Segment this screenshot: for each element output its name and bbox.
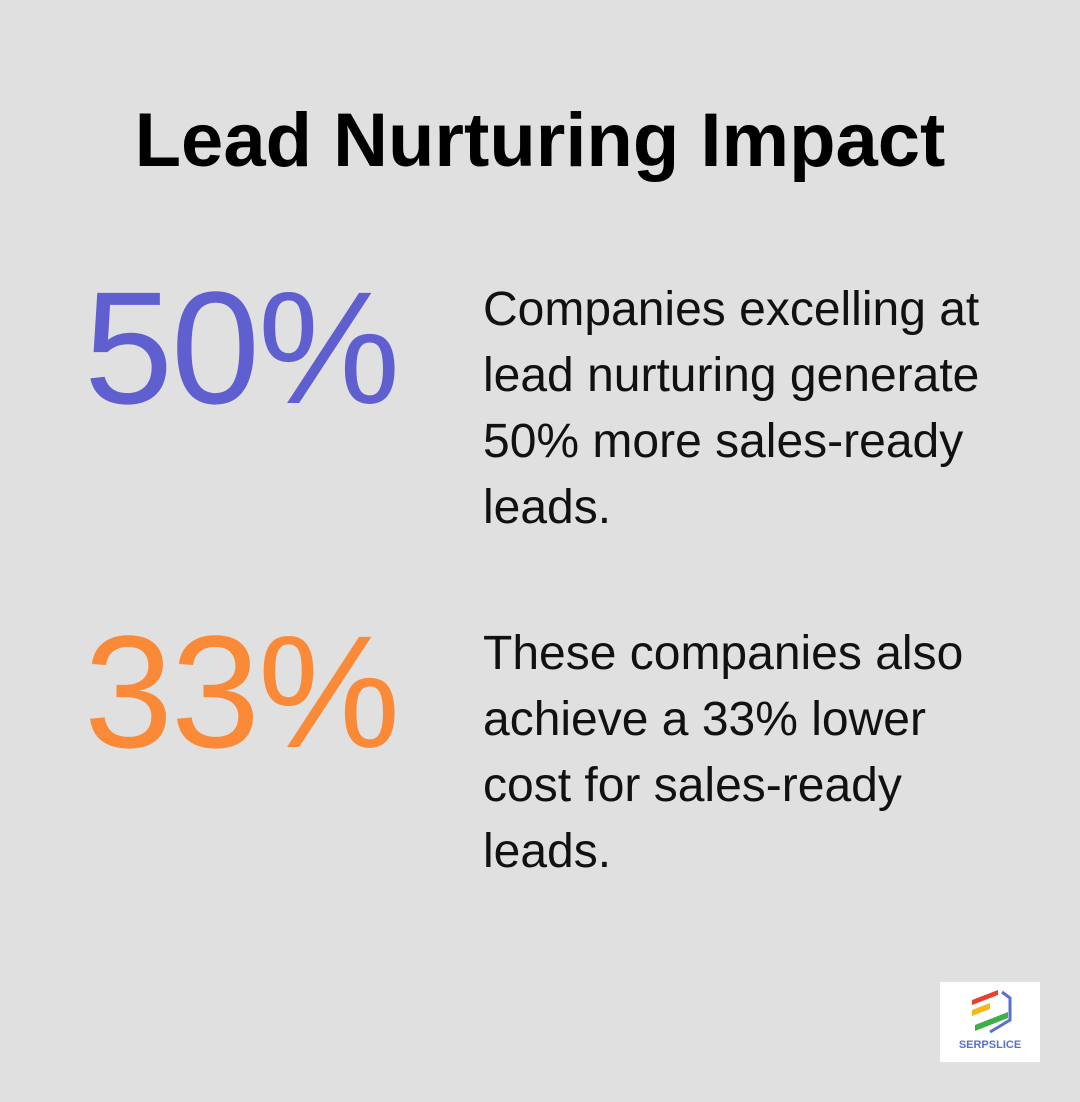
text: 33% description: [483, 627, 963, 878]
text: 33% description: These companies also: [483, 627, 963, 680]
text: 33% description: leads.: [483, 825, 611, 878]
stat: 33%: 33%: [84, 602, 398, 781]
logo: serpslice: [940, 982, 1040, 1062]
logo: serpslice: SERPSLICE: [959, 1039, 1021, 1051]
text: 50% description: 50% more sales-ready: [483, 415, 963, 468]
text: 50% description: lead nurturing generate: [483, 349, 979, 402]
text: 50% description: [483, 283, 979, 534]
title: Lead Nurturing Impact: [135, 98, 945, 183]
text: 33% description: cost for sales-ready: [483, 759, 902, 812]
text: 50% description: Companies excelling at: [483, 283, 979, 336]
text: 50% description: leads.: [483, 481, 611, 534]
text: 33% description: achieve a 33% lower: [483, 693, 926, 746]
stat: 50%: 50%: [84, 258, 398, 437]
